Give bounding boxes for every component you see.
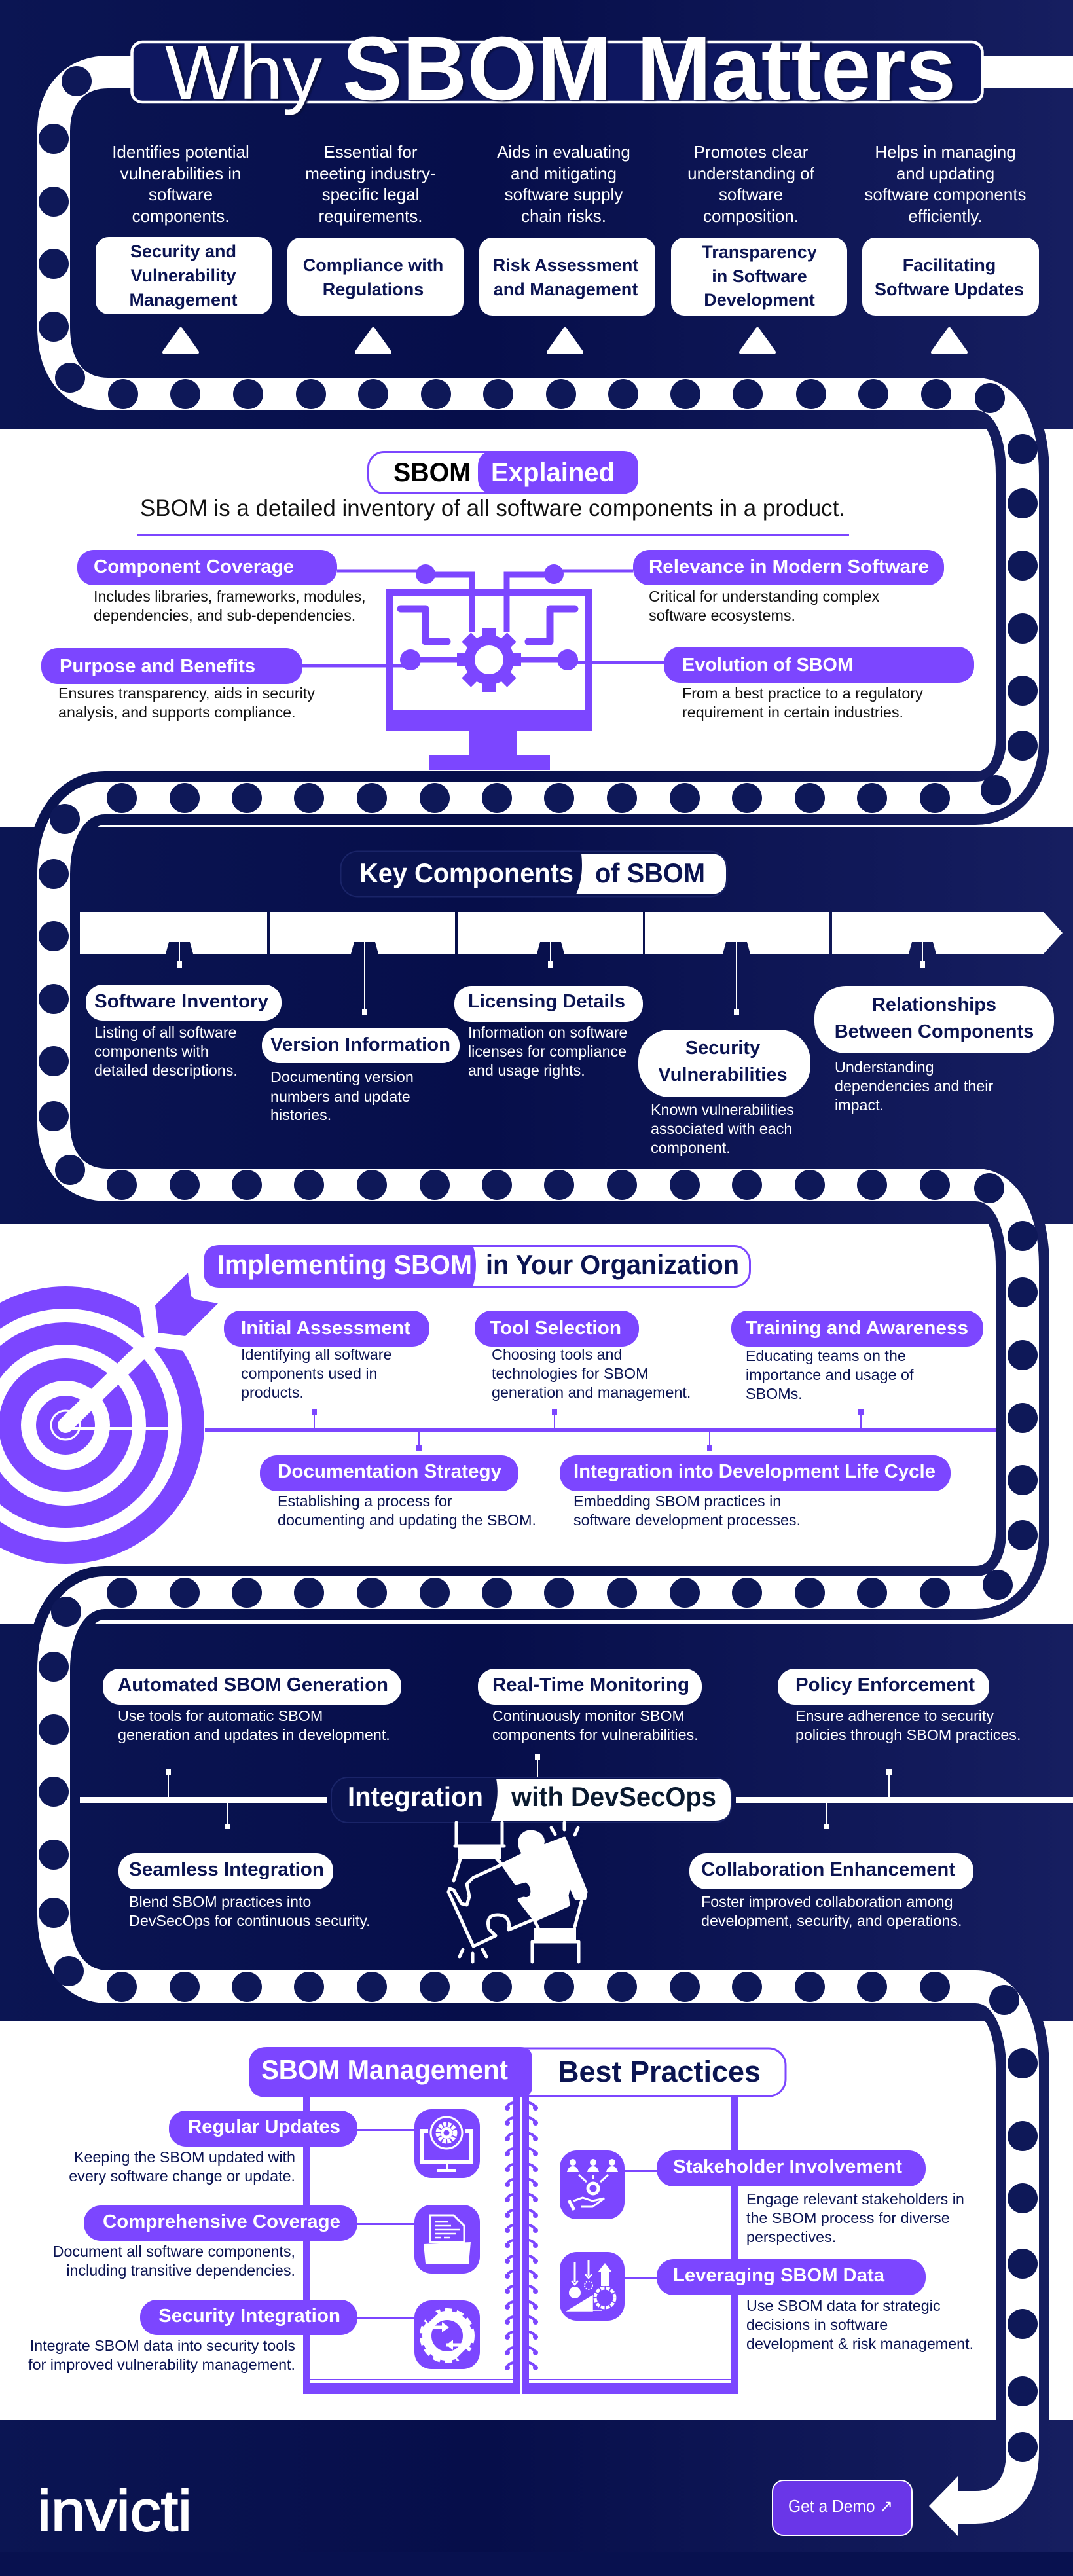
icon: cost chart and gear <box>560 2252 625 2321</box>
logo: invicti: invicti <box>37 2478 192 2543</box>
callout: evolution of SBOM: requirement in certain industries. <box>682 704 903 721</box>
notebook <box>303 2095 738 2394</box>
callout: relevance in modern software: software ecosystems. <box>649 607 795 624</box>
panel: why SBOM matters columns <box>96 142 1039 352</box>
callout: relevance in modern software: Critical for understanding complex <box>649 588 880 605</box>
text: compliance description: specific legal <box>322 185 419 204</box>
callout: automated SBOM generation: generation and updates in development. <box>118 1726 390 1743</box>
callout: comprehensive coverage <box>53 2205 357 2279</box>
text: transparency description: software <box>719 185 783 204</box>
callout: licensing details <box>454 986 643 1079</box>
panel background: implementing SBOM <box>0 1224 1073 1624</box>
callout: tool selection: Choosing tools and <box>492 1346 622 1363</box>
callout: documentation strategy: Documentation Strategy <box>278 1461 501 1482</box>
callout: documentation strategy: Establishing a process for <box>278 1493 452 1510</box>
callout: relationships between components <box>814 986 1054 1114</box>
callout: tool selection: generation and management. <box>492 1384 691 1401</box>
callout: security integration: Integrate SBOM data into security tools <box>30 2337 295 2354</box>
callout: regular updates: Keeping the SBOM updated with <box>74 2149 295 2166</box>
heading: with DevSecOps <box>511 1781 716 1812</box>
callout: evolution of SBOM: From a best practice to a regulatory <box>682 685 923 702</box>
callout: relevance in modern software: Relevance in Modern Software <box>649 556 929 577</box>
callout: security vulnerabilities <box>638 1030 810 1156</box>
card: security and vulnerability management: Management <box>129 290 238 310</box>
text: updates description: Helps in managing <box>875 142 1016 162</box>
callout: collaboration enhancement: development, security, and operations. <box>701 1912 962 1929</box>
callout: stakeholder involvement: the SBOM process for diverse <box>746 2209 950 2226</box>
text: definition: SBOM is a detailed inventory of all software components in a product. <box>140 496 845 521</box>
callout: version information: numbers and update <box>270 1088 410 1105</box>
panel: key components of SBOM <box>80 851 1063 1156</box>
button: get a demo: Get a Demo ↗ <box>788 2496 893 2516</box>
callout: seamless integration <box>118 1853 371 1929</box>
callout: integration into development life cycle: Integration into Development Life Cycle <box>573 1461 936 1482</box>
callout: evolution of SBOM: Evolution of SBOM <box>682 655 853 676</box>
callout: policy enforcement <box>778 1669 1021 1743</box>
callout: documentation strategy: documenting and updating the SBOM. <box>278 1512 536 1529</box>
callout: version information: Version Information <box>270 1034 450 1055</box>
card: security and vulnerability management: Vulnerability <box>130 266 236 285</box>
callout: comprehensive coverage: including transitive dependencies. <box>66 2262 295 2279</box>
title: Why <box>165 29 323 115</box>
callout: security integration: Security Integration <box>158 2306 340 2327</box>
panel background: footer strip <box>0 2552 1073 2576</box>
callout: purpose and benefits: Purpose and Benefits <box>60 656 255 677</box>
callout: initial assessment: Identifying all software <box>241 1346 392 1363</box>
callout: licensing details: Information on software <box>468 1024 627 1041</box>
callout: leveraging SBOM data: decisions in software <box>746 2316 888 2333</box>
callout: software inventory: detailed descriptions. <box>94 1062 238 1079</box>
callout: collaboration enhancement: Foster improved collaboration among <box>701 1893 953 1910</box>
title: SBOM Matters <box>342 18 956 119</box>
callout: version information: Documenting version <box>270 1068 414 1085</box>
callout: relationships between components: impact. <box>835 1097 884 1114</box>
callout: tool selection: Tool Selection <box>490 1318 621 1339</box>
card: transparency in software development: Development <box>704 290 815 310</box>
heading: SBOM Management <box>261 2054 508 2085</box>
panel background: best practices <box>0 2021 1073 2420</box>
timeline <box>205 1409 996 1451</box>
heading <box>249 2047 786 2097</box>
callout: collaboration enhancement <box>689 1853 973 1929</box>
connectors <box>357 2129 658 2319</box>
text: compliance description: requirements. <box>319 206 422 226</box>
heading <box>331 1777 731 1823</box>
callout: leveraging SBOM data: Use SBOM data for strategic <box>746 2297 941 2314</box>
callout: software inventory: Listing of all software <box>94 1024 237 1041</box>
callout: licensing details: licenses for compliance <box>468 1043 627 1060</box>
icon: monitor with gear <box>414 2109 480 2178</box>
panel: integration with DevSecOps <box>80 1669 1073 1962</box>
panel: implementing SBOM <box>0 1245 996 1564</box>
callout: automated SBOM generation: Automated SBOM Generation <box>118 1675 388 1696</box>
card: compliance with regulations: Compliance with <box>303 255 443 275</box>
heading <box>204 1245 750 1288</box>
card: compliance with regulations: Regulations <box>323 280 424 299</box>
button: get a demo <box>773 2480 912 2535</box>
icon: hands joining puzzle pieces <box>448 1823 586 1962</box>
icon: document folder <box>414 2205 480 2274</box>
callout: policy enforcement: Policy Enforcement <box>795 1675 975 1696</box>
text: vulnerability description: components. <box>132 206 229 226</box>
callout: training and awareness: SBOMs. <box>746 1385 803 1402</box>
text: risk description: software supply <box>505 185 623 204</box>
callout: licensing details: Licensing Details <box>468 991 625 1012</box>
heading: of SBOM <box>595 858 705 888</box>
text: compliance description: meeting industry- <box>305 164 436 183</box>
callout: security integration: for improved vulnerability management. <box>28 2356 295 2373</box>
callout: real-time monitoring: components for vulnerabilities. <box>492 1726 699 1743</box>
callout: evolution of SBOM <box>664 647 974 721</box>
card: transparency in software development: in Software <box>712 266 807 286</box>
callout: licensing details: and usage rights. <box>468 1062 585 1079</box>
callout: software inventory: components with <box>94 1043 209 1060</box>
callout: leveraging SBOM data: development & risk management. <box>746 2335 973 2352</box>
callout: leveraging SBOM data <box>657 2259 973 2352</box>
text: risk description: chain risks. <box>521 206 606 226</box>
callout: integration into development life cycle: Embedding SBOM practices in <box>573 1493 781 1510</box>
arrow: track end <box>929 2476 958 2536</box>
text: transparency description: composition. <box>703 206 799 226</box>
callout: stakeholder involvement: Engage relevant stakeholders in <box>746 2190 964 2207</box>
text: vulnerability description: software <box>149 185 213 204</box>
callout: software inventory <box>86 985 282 1079</box>
callout: training and awareness <box>731 1311 983 1402</box>
callout: training and awareness: importance and usage of <box>746 1366 914 1383</box>
text: updates description: and updating <box>896 164 994 183</box>
text: vulnerability description: vulnerabilities in <box>120 164 241 183</box>
card: facilitating software updates <box>862 238 1039 316</box>
icon: gear with cycle arrows <box>414 2300 480 2369</box>
callout: security vulnerabilities: component. <box>651 1139 731 1156</box>
callout: stakeholder involvement: perspectives. <box>746 2228 836 2245</box>
callout: policy enforcement: policies through SBOM practices. <box>795 1726 1021 1743</box>
text: transparency description: understanding of <box>687 164 815 183</box>
card: risk assessment and management: Risk Assessment <box>493 255 638 275</box>
callout: software inventory: Software Inventory <box>94 991 268 1012</box>
card: facilitating software updates: Facilitating <box>903 255 996 275</box>
callout: security vulnerabilities: Vulnerabilities <box>658 1064 788 1085</box>
heading: in Your Organization <box>486 1249 739 1280</box>
panel background: SBOM explained <box>0 429 1073 827</box>
heading: SBOM <box>393 458 471 487</box>
callout: initial assessment: components used in <box>241 1365 378 1382</box>
callout: component coverage: Includes libraries, frameworks, modules, <box>94 588 366 605</box>
card: risk assessment and management <box>479 238 655 316</box>
heading: Integration <box>348 1781 483 1812</box>
callout: relationships between components: Relationships <box>872 994 996 1015</box>
text: risk description: Aids in evaluating <box>497 142 630 162</box>
card: security and vulnerability management <box>96 237 272 314</box>
callout: regular updates <box>69 2111 357 2185</box>
callout: initial assessment: Initial Assessment <box>241 1318 410 1339</box>
callout: version information <box>262 1028 460 1123</box>
card: transparency in software development: Transparency <box>702 242 817 262</box>
callout: security vulnerabilities: associated with each <box>651 1120 792 1137</box>
callout: stakeholder involvement <box>657 2150 964 2245</box>
callout: real-time monitoring: Continuously monitor SBOM <box>492 1707 685 1724</box>
callout: automated SBOM generation <box>103 1669 401 1743</box>
heading: Best Practices <box>558 2055 761 2088</box>
text: transparency description: Promotes clear <box>694 142 809 162</box>
callout: regular updates: every software change or update. <box>69 2168 295 2185</box>
callout: leveraging SBOM data: Leveraging SBOM Data <box>673 2265 885 2286</box>
callout: stakeholder involvement: Stakeholder Involvement <box>673 2156 902 2177</box>
card: compliance with regulations <box>287 238 464 316</box>
callout: collaboration enhancement: Collaboration Enhancement <box>701 1859 955 1880</box>
card: risk assessment and management: and Management <box>494 280 638 299</box>
card: security and vulnerability management: Security and <box>130 242 236 261</box>
panel: SBOM explained <box>41 451 974 770</box>
callout: initial assessment: products. <box>241 1384 304 1401</box>
callout: comprehensive coverage: Comprehensive Coverage <box>103 2211 340 2232</box>
callout: purpose and benefits: analysis, and supports compliance. <box>58 704 296 721</box>
callout: integration into development life cycle <box>560 1455 951 1529</box>
callout: training and awareness: Training and Awareness <box>746 1318 968 1339</box>
callout: initial assessment <box>224 1311 429 1401</box>
card: transparency in software development <box>671 238 847 316</box>
callout: policy enforcement: Ensure adherence to security <box>795 1707 994 1724</box>
callout: automated SBOM generation: Use tools for automatic SBOM <box>118 1707 323 1724</box>
text: updates description: efficiently. <box>908 206 983 226</box>
callout: component coverage <box>77 550 366 624</box>
icon: target with arrow <box>0 1273 218 1564</box>
callout: integration into development life cycle: software development processes. <box>573 1512 801 1529</box>
heading: Key Components <box>359 858 573 888</box>
heading <box>340 851 727 897</box>
heading: Explained <box>491 458 615 487</box>
callout: regular updates: Regular Updates <box>188 2116 340 2137</box>
callout: tool selection <box>475 1311 691 1401</box>
timeline <box>80 1754 1073 1829</box>
text: vulnerability description: Identifies potential <box>112 142 249 162</box>
text: updates description: software components <box>864 185 1027 204</box>
callout: training and awareness: Educating teams on the <box>746 1347 906 1364</box>
callout: relevance in modern software <box>633 550 944 624</box>
callout: relationships between components: dependencies and their <box>835 1078 993 1095</box>
callout: purpose and benefits: Ensures transparency, aids in security <box>58 685 315 702</box>
callout: relationships between components: Between Components <box>835 1021 1034 1042</box>
icon: monitor with circuit and gear <box>302 564 664 770</box>
callout: seamless integration: DevSecOps for continuous security. <box>129 1912 371 1929</box>
callout: seamless integration: Blend SBOM practices into <box>129 1893 311 1910</box>
callout: component coverage: Component Coverage <box>94 556 294 577</box>
callout: security vulnerabilities: Known vulnerabilities <box>651 1101 794 1118</box>
heading <box>368 451 638 494</box>
callout: version information: histories. <box>270 1106 331 1123</box>
callout: relationships between components: Understanding <box>835 1059 934 1076</box>
callout: seamless integration: Seamless Integration <box>129 1859 324 1880</box>
icon: stakeholders and gear <box>560 2150 625 2219</box>
callout: tool selection: technologies for SBOM <box>492 1365 649 1382</box>
callout: real-time monitoring <box>478 1669 702 1743</box>
callout: security vulnerabilities: Security <box>685 1038 760 1059</box>
panel: best practices <box>28 2047 973 2394</box>
callout: security integration <box>28 2300 357 2373</box>
heading: Implementing SBOM <box>217 1249 472 1280</box>
callout: component coverage: dependencies, and sub-dependencies. <box>94 607 355 624</box>
callout: documentation strategy <box>260 1455 536 1529</box>
card: facilitating software updates: Software Updates <box>875 280 1024 299</box>
icons: up triangles <box>164 329 966 352</box>
callout: purpose and benefits <box>41 648 315 721</box>
callout: comprehensive coverage: Document all software components, <box>53 2243 295 2260</box>
text: compliance description: Essential for <box>323 142 418 162</box>
text: risk description: and mitigating <box>511 164 617 183</box>
ribbon timeline <box>80 912 1063 1015</box>
callout: real-time monitoring: Real-Time Monitoring <box>492 1675 689 1696</box>
